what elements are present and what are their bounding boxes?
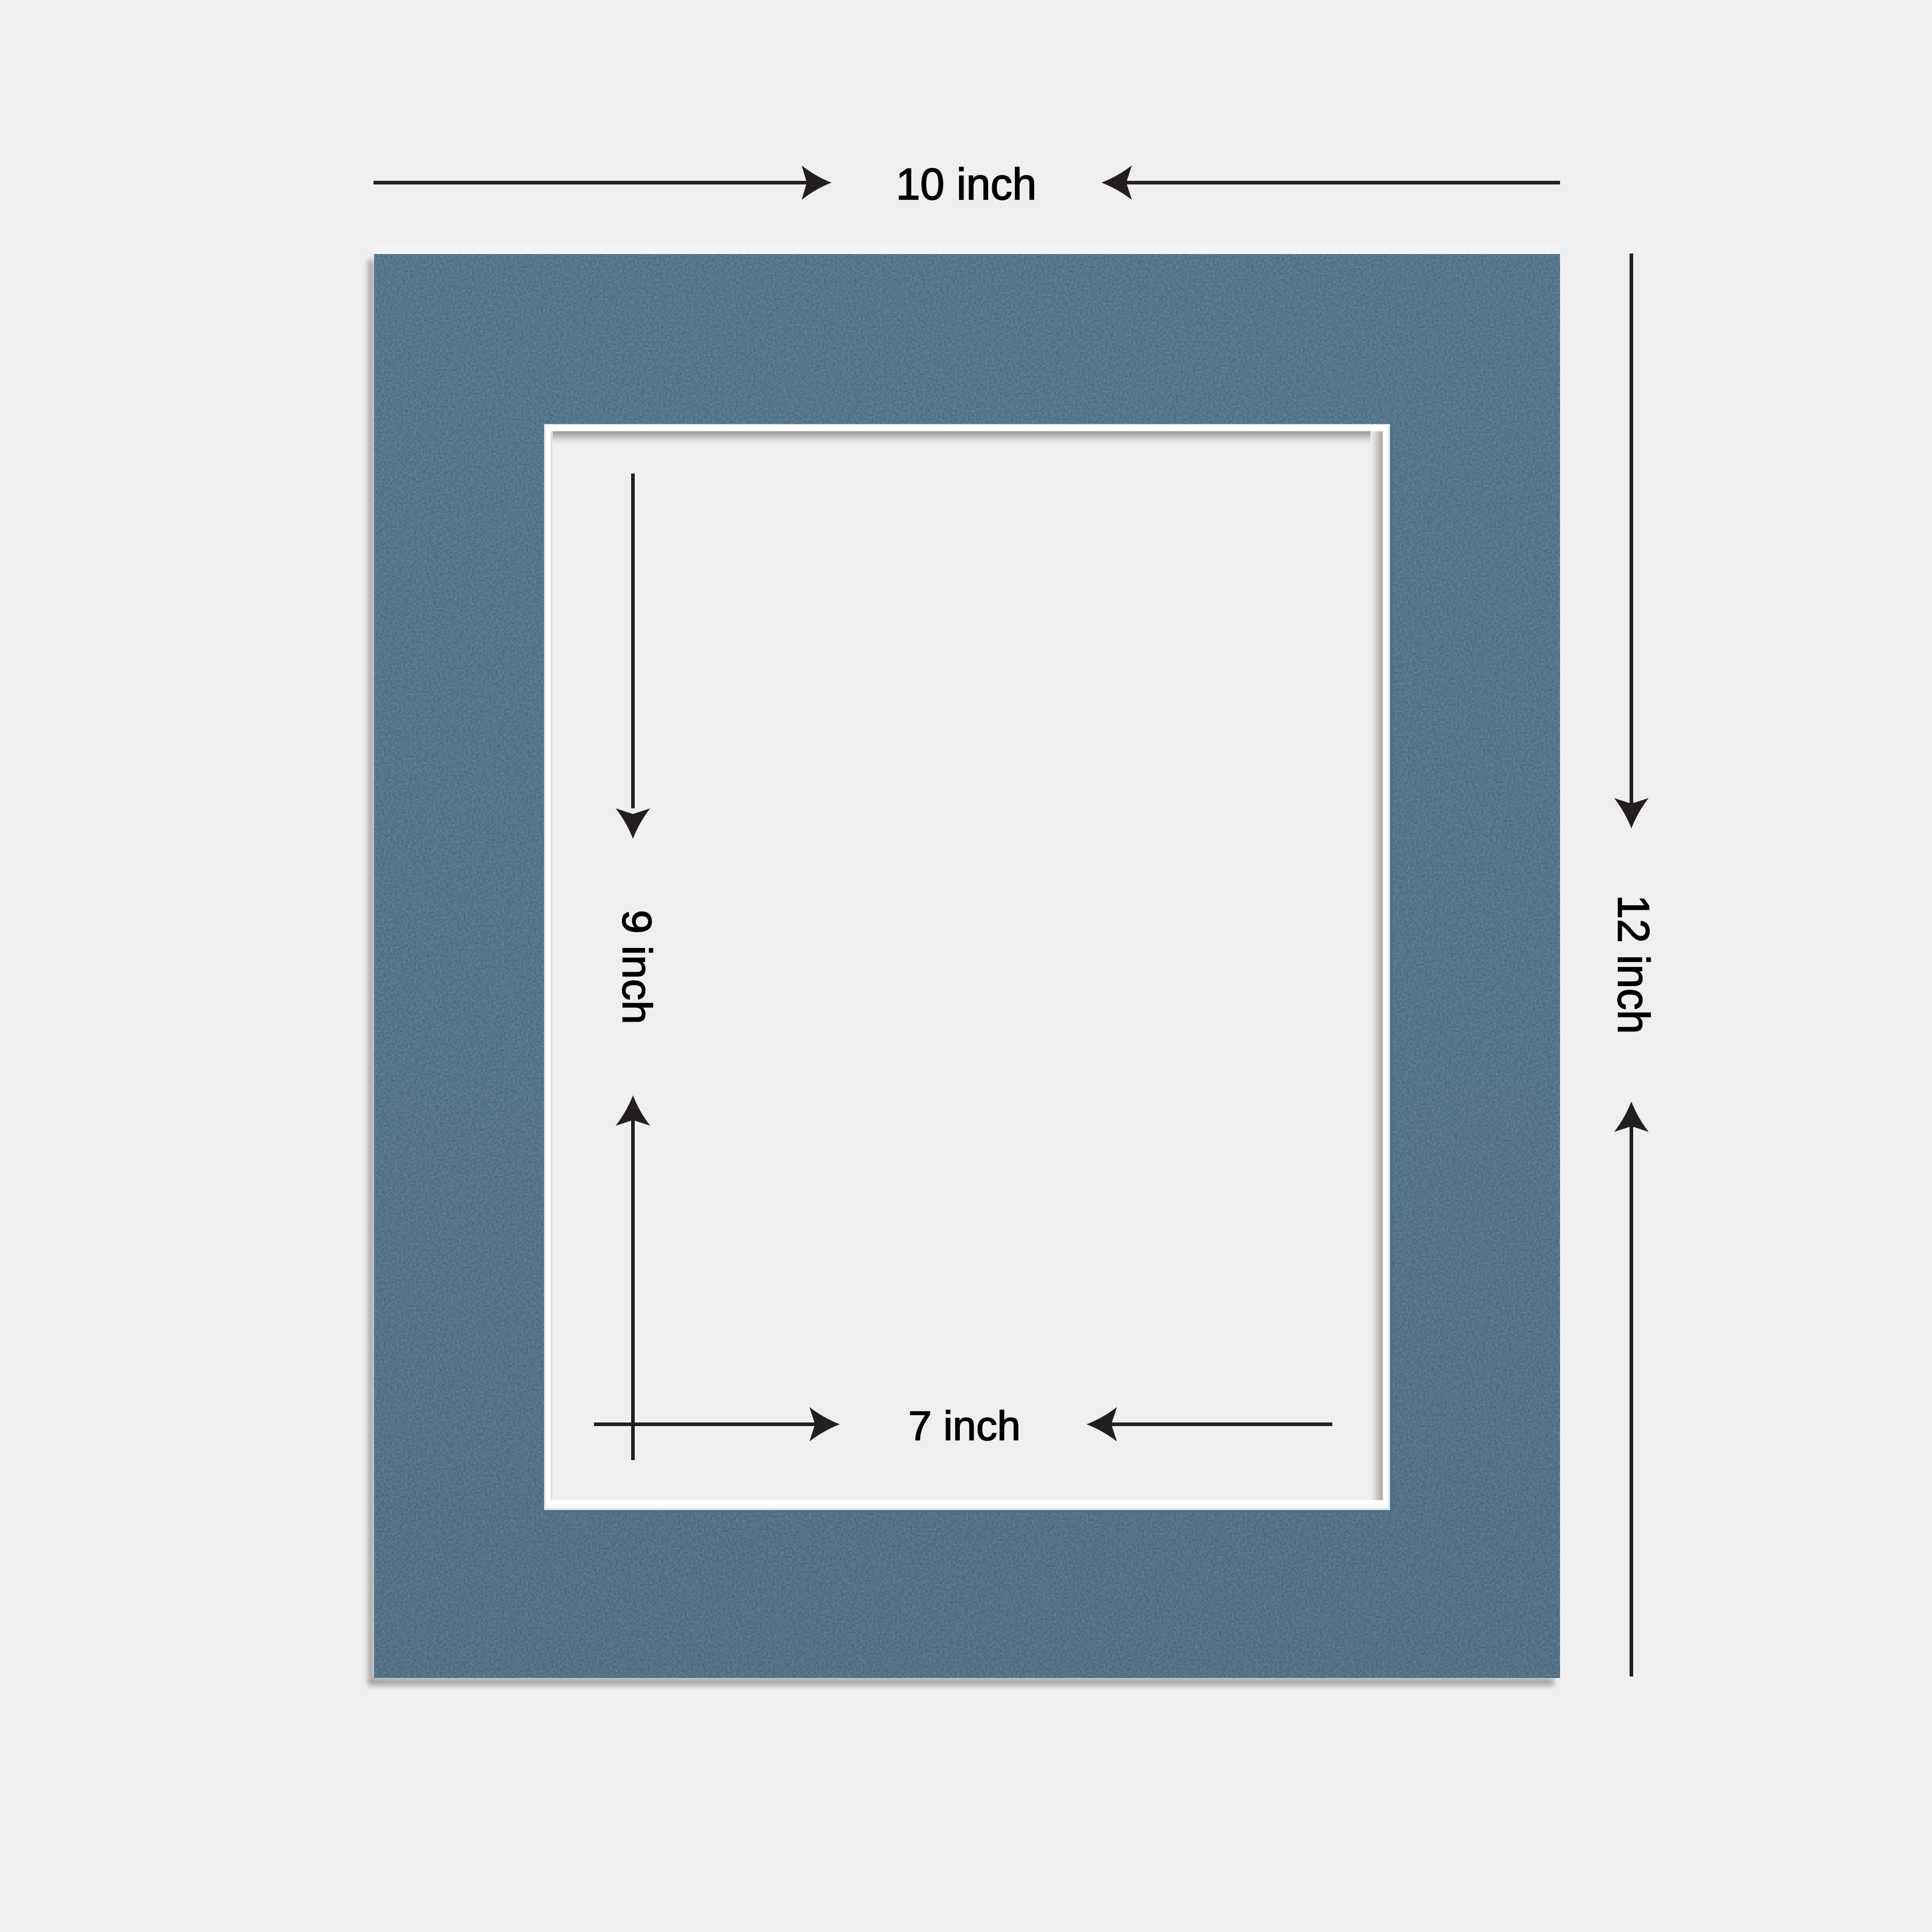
window opening — [551, 431, 1383, 1500]
label: 10 inch: 10 inch — [896, 160, 1037, 209]
dimension: outer height 12 inch — [1608, 253, 1658, 1676]
label: 7 inch: 7 inch — [908, 1403, 1021, 1449]
label: 9 inch: 9 inch — [614, 910, 660, 1024]
mat drop shadow — [368, 260, 1554, 1686]
arrow: pointing left — [1087, 1407, 1332, 1442]
arrow: pointing up — [616, 1095, 650, 1460]
dimension: outer width 10 inch — [374, 160, 1560, 209]
mat paper grain — [374, 254, 1560, 1678]
arrow: pointing right — [594, 1407, 840, 1442]
dimension: opening height 9 inch — [614, 473, 660, 1460]
arrow: pointing up — [1614, 1101, 1649, 1676]
window bevel — [544, 424, 1393, 1513]
arrow: pointing left — [1101, 165, 1560, 200]
arrow: pointing right — [374, 165, 832, 200]
mat surface — [374, 254, 1560, 1678]
label: 12 inch: 12 inch — [1608, 895, 1658, 1034]
dimension: opening width 7 inch — [594, 1403, 1332, 1449]
panel: mat board — [368, 244, 1560, 1686]
arrow: pointing down — [616, 473, 650, 839]
arrow: pointing down — [1614, 253, 1649, 828]
mat top highlight — [374, 244, 1560, 254]
